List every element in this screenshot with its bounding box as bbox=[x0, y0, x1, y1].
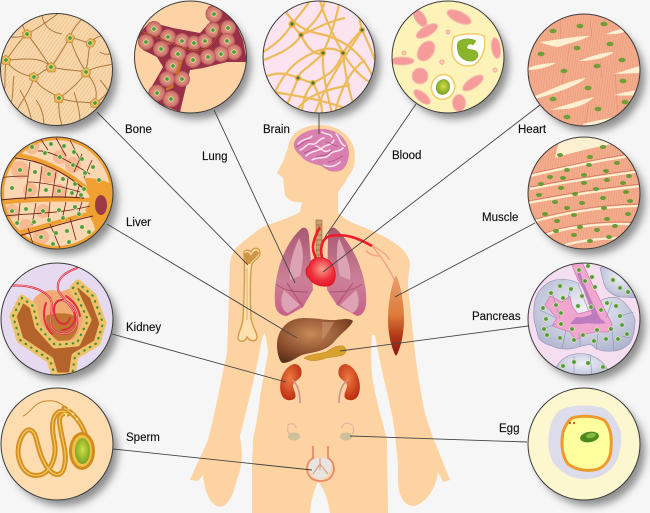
cell: kidney bbox=[1, 263, 113, 376]
organ: heart bbox=[306, 258, 335, 286]
cell: heart muscle bbox=[528, 14, 642, 126]
organ: arm muscle bbox=[388, 275, 404, 356]
labels: Pancreas bbox=[472, 311, 521, 323]
cell: sperm bbox=[1, 388, 113, 500]
organ: brain bbox=[294, 129, 349, 172]
organ: lungs and trachea bbox=[275, 220, 366, 316]
labels: Lung bbox=[202, 151, 228, 163]
cell: brain neurons bbox=[263, 0, 375, 113]
leader lines bbox=[97, 104, 540, 470]
organ: liver crease bbox=[322, 322, 334, 340]
labels: Bone bbox=[125, 124, 152, 136]
cell: egg bbox=[528, 388, 640, 500]
labels: Egg bbox=[499, 423, 519, 435]
organ: arteries and vessels bbox=[313, 227, 396, 285]
cell: skeletal muscle bbox=[528, 137, 642, 249]
organ: kidneys bbox=[280, 364, 360, 403]
labels: Muscle bbox=[482, 212, 518, 224]
organ: pancreas bbox=[304, 346, 346, 361]
labels: Heart bbox=[518, 124, 547, 136]
human body silhouette bbox=[190, 125, 450, 513]
cell: pancreas bbox=[528, 262, 642, 378]
labels: Sperm bbox=[126, 432, 160, 444]
organ: humerus bone bbox=[238, 248, 260, 341]
labels: Liver bbox=[126, 217, 151, 229]
labels: Brain bbox=[263, 124, 290, 136]
cell: blood bbox=[390, 1, 504, 113]
labels: Blood bbox=[392, 150, 421, 162]
cell: bone bbox=[0, 12, 113, 126]
cell: liver bbox=[0, 137, 115, 249]
labels bbox=[125, 124, 547, 444]
labels: Kidney bbox=[126, 322, 161, 334]
organ: liver bbox=[277, 318, 353, 363]
organ: male reproductive bbox=[307, 446, 334, 481]
cell: lung bbox=[134, 1, 247, 113]
organ: ovaries bbox=[287, 423, 354, 440]
